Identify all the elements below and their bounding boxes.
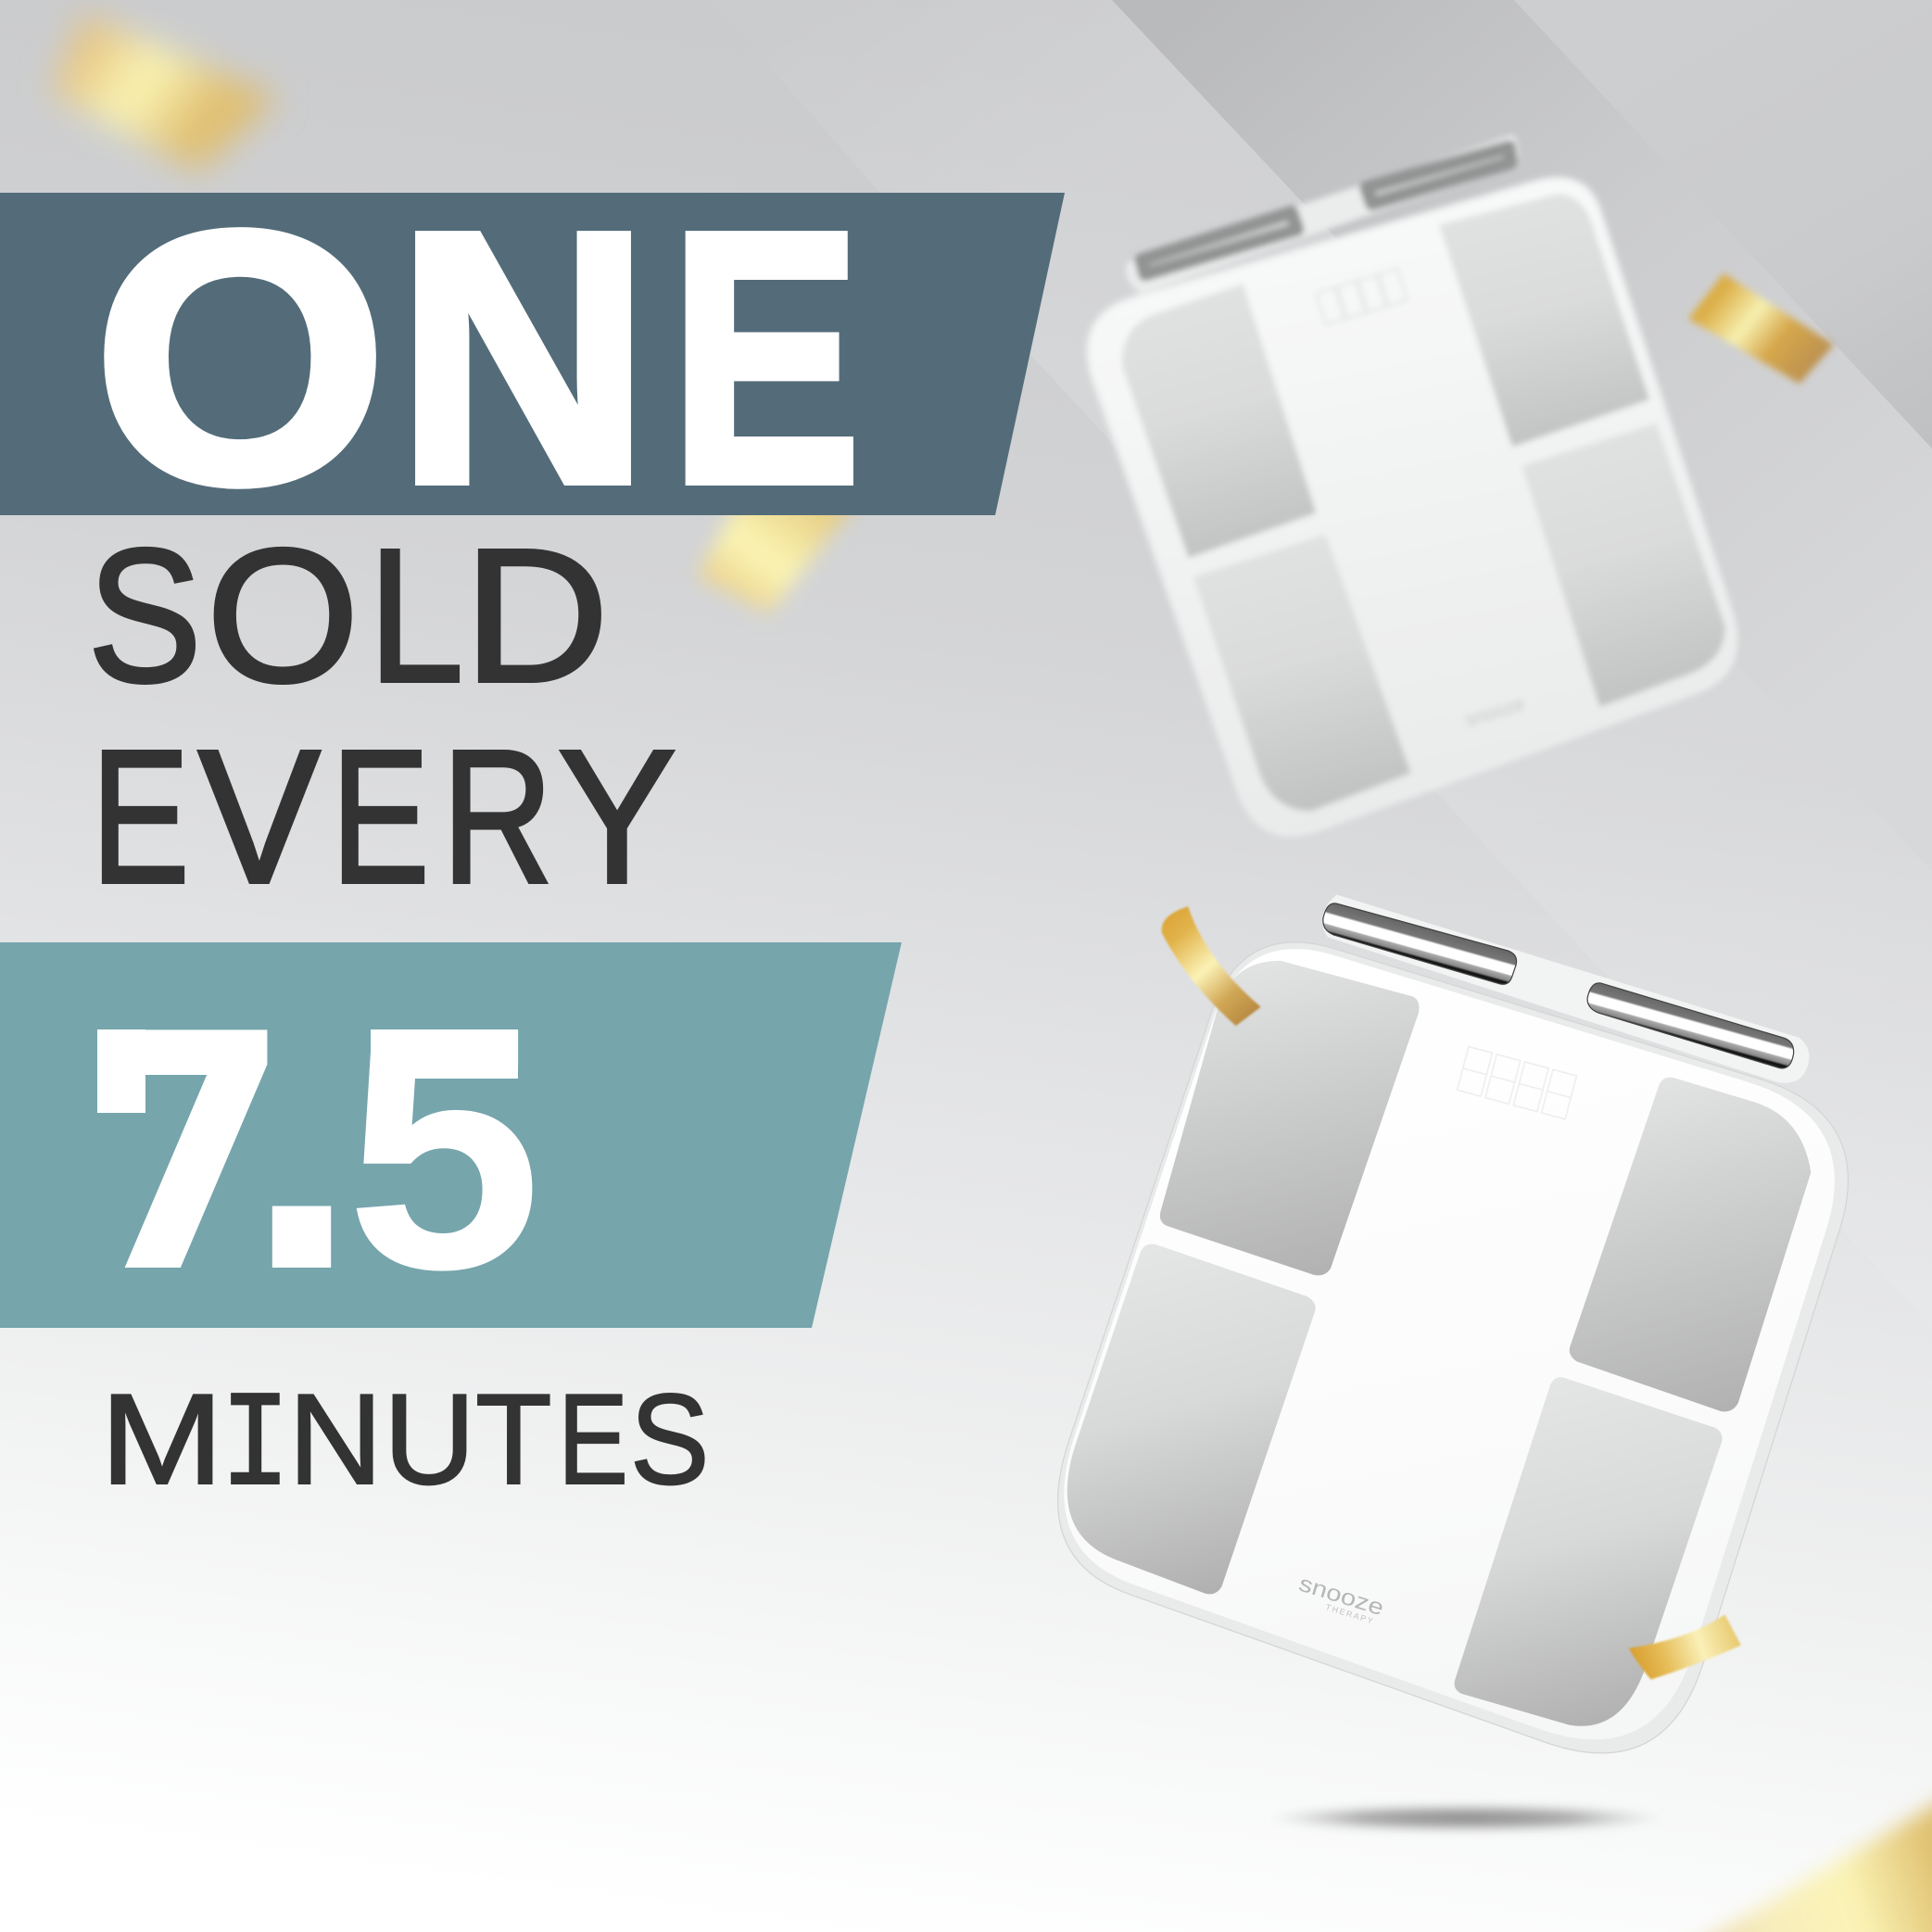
text: MINUTES: S [630, 1368, 710, 1511]
pad: upper left [1160, 961, 1419, 1275]
text: MINUTES: E [558, 1368, 628, 1511]
heading: ONE: O [94, 158, 387, 557]
text: MINUTES: U [384, 1368, 475, 1511]
text: EVERY: V [198, 711, 321, 923]
scale body [1088, 179, 1736, 835]
text: MINUTES: I [221, 1371, 291, 1525]
pad: upper right [1570, 1078, 1811, 1411]
pad: lower right [1455, 1377, 1723, 1726]
brand logo [1294, 1571, 1386, 1627]
faint display [1316, 269, 1408, 325]
display digits [1458, 1046, 1576, 1119]
text: SOLD: L [368, 510, 463, 722]
text: EVERY: E [331, 711, 429, 923]
pad: lower left [1067, 1244, 1316, 1594]
handle strip [1126, 135, 1519, 293]
text: EVERY: E [91, 711, 189, 923]
text: EVERY: R [442, 711, 553, 923]
scale top surface [1064, 949, 1835, 1739]
handle with chrome grips [1322, 895, 1809, 1083]
scale outer edge [1058, 942, 1848, 1753]
teal number band [0, 942, 902, 1328]
text: SOLD: O [207, 510, 360, 722]
faint logo: snooze [1463, 694, 1527, 731]
gold ribbon, on scale top left [1162, 906, 1261, 1026]
blurred gold ribbon, top left [51, 14, 278, 171]
brand logo: THERAPY [1324, 1602, 1376, 1626]
number: 7.5 with serif on the seven: . [238, 966, 365, 1345]
blurred gold ribbon, bottom right corner [1663, 1793, 1932, 1932]
text: MINUTES: N [288, 1368, 383, 1511]
text: EVERY: Y [558, 711, 676, 923]
text: SOLD: S [88, 510, 202, 722]
text: MINUTES: T [475, 1368, 552, 1511]
number: 7.5 with serif on the seven [80, 955, 542, 1345]
number: 7.5 with serif on the seven: 5 [346, 955, 542, 1342]
pad: lower right [1522, 423, 1725, 707]
foreground scale [1058, 895, 1848, 1753]
blurred background scale [1088, 135, 1736, 835]
gold ribbon, on scale bottom right [1629, 1614, 1741, 1680]
slate heading band [0, 193, 1065, 515]
text: MINUTES: M [100, 1368, 223, 1511]
heading: ONE: E [670, 158, 861, 557]
pad: upper right [1439, 194, 1649, 447]
handle bars [1142, 147, 1511, 274]
heading: ONE: N [397, 158, 650, 557]
brand logo: snooze [1296, 1571, 1386, 1621]
number: 7.5 with serif on the seven: 7 [80, 966, 292, 1345]
gold ribbon, right of blurred scale [1688, 273, 1834, 384]
text: SOLD: D [463, 510, 609, 722]
floor shadow under scale [1267, 1804, 1665, 1832]
pad: upper left [1122, 284, 1316, 558]
blurred gold ribbon, under heading band [697, 496, 857, 613]
pad: lower left [1193, 535, 1410, 811]
